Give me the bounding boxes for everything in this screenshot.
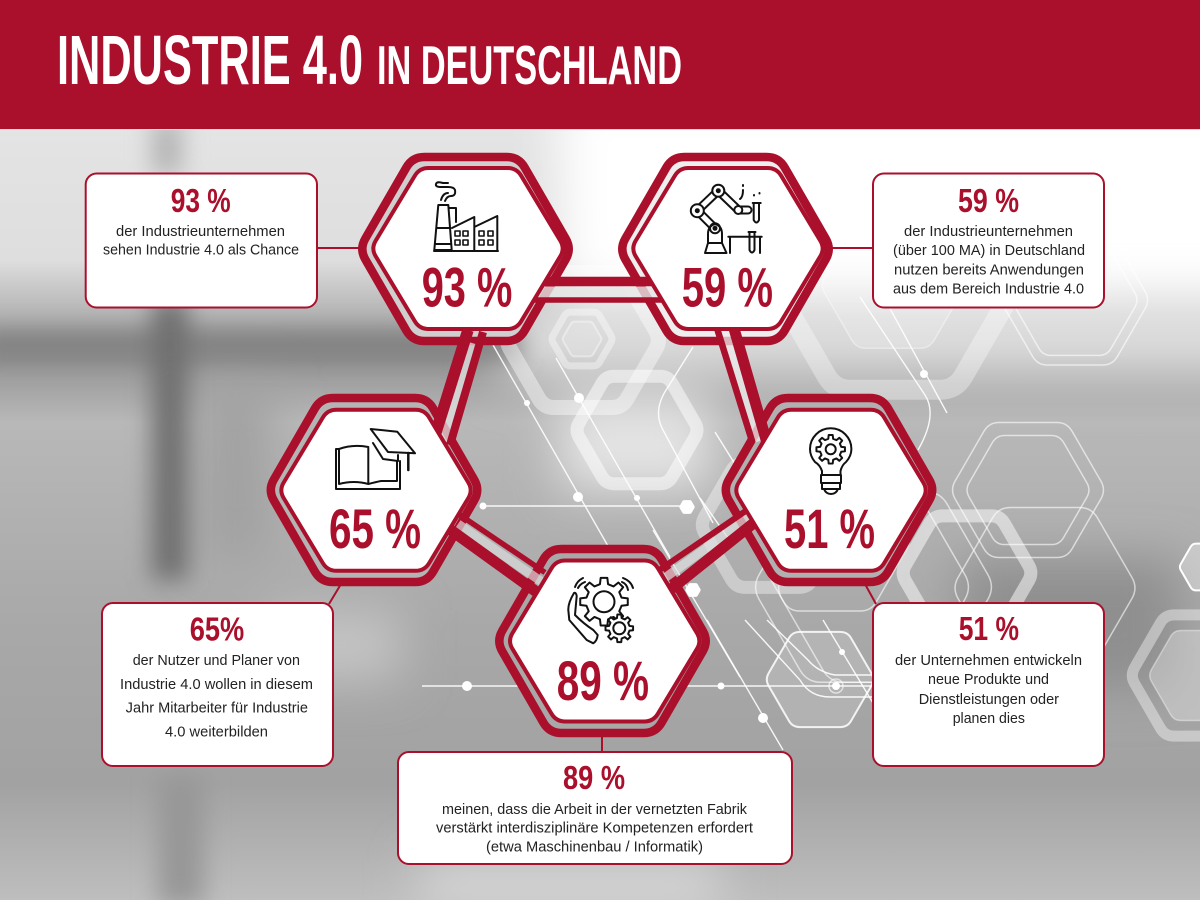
callout: 65 %: Industrie 4.0 wollen in diesem [120, 677, 313, 693]
callout: 51 %: 51 % [959, 610, 1019, 647]
callout: 89 % [398, 752, 792, 864]
callout: 59 %: 59 % [958, 182, 1019, 219]
callout: 93 %: 93 % [171, 182, 231, 219]
callout: 51 %: neue Produkte und [928, 672, 1049, 688]
callout: 65 %: 4.0 weiterbilden [165, 725, 268, 741]
callout: 93 %: der Industrieunternehmen [116, 224, 285, 240]
title: INDUSTRIE 4.0 [57, 21, 363, 99]
icon: book with graduation cap [336, 429, 415, 489]
icon: gears and hand [568, 578, 633, 643]
value: 59 %: 59 % [682, 256, 773, 319]
icon: robot arm in laboratory [691, 185, 762, 253]
callout: 59 %: aus dem Bereich Industrie 4.0 [893, 282, 1084, 298]
callout: 51 % [873, 603, 1104, 766]
callout: 89 %: verstärkt interdisziplinäre Kompetenzen erfordert [436, 821, 753, 837]
callout: 65 %: Jahr Mitarbeiter für Industrie [126, 701, 308, 717]
callout: 93 %: sehen Industrie 4.0 als Chance [103, 242, 299, 258]
callout: 89 %: (etwa Maschinenbau / Informatik) [486, 840, 703, 856]
connectors between hexagons [432, 282, 767, 598]
icon: factory [434, 182, 498, 251]
icon: light bulb with gear [810, 428, 851, 494]
value: 89 %: 89 % [557, 649, 649, 712]
callout: 51 %: Dienstleistungen oder [919, 692, 1059, 708]
callout: 59 %: nutzen bereits Anwendungen [894, 262, 1084, 278]
callout: 65 %: der Nutzer und Planer von [133, 653, 300, 669]
callout: 59 %: der Industrieunternehmen [904, 224, 1073, 240]
decorative hexagon network [422, 180, 1200, 750]
hexagon outer frames [271, 157, 932, 733]
value: 93 %: 93 % [422, 256, 512, 319]
hexagon panel: 59 % robot arm [633, 168, 823, 329]
callout: 65 %: 65% [190, 611, 244, 648]
hexagon panel: 89 % gears and hand [510, 560, 699, 722]
callout: 51 %: planen dies [953, 711, 1025, 727]
title: IN DEUTSCHLAND [377, 34, 682, 96]
callout: 51 %: der Unternehmen entwickeln [895, 653, 1082, 669]
hexagon panel: 51 % light bulb [736, 410, 926, 571]
value: 65 %: 65 % [329, 497, 421, 560]
callout leader lines [316, 248, 876, 753]
value: 51 %: 51 % [784, 497, 875, 560]
callout: 89 %: meinen, dass die Arbeit in der vernetzten Fabrik [442, 802, 748, 818]
callout: 65 % [102, 603, 333, 766]
callout: 89 %: 89 % [563, 759, 625, 796]
callout: 93 % [86, 174, 317, 308]
hexagon panel: 65 % book and graduation cap [281, 410, 471, 571]
callout: 59 %: (über 100 MA) in Deutschland [893, 243, 1085, 259]
hexagon panel: 93 % factory [373, 168, 563, 329]
callout: 59 % [873, 174, 1104, 308]
header bar [0, 0, 1200, 130]
